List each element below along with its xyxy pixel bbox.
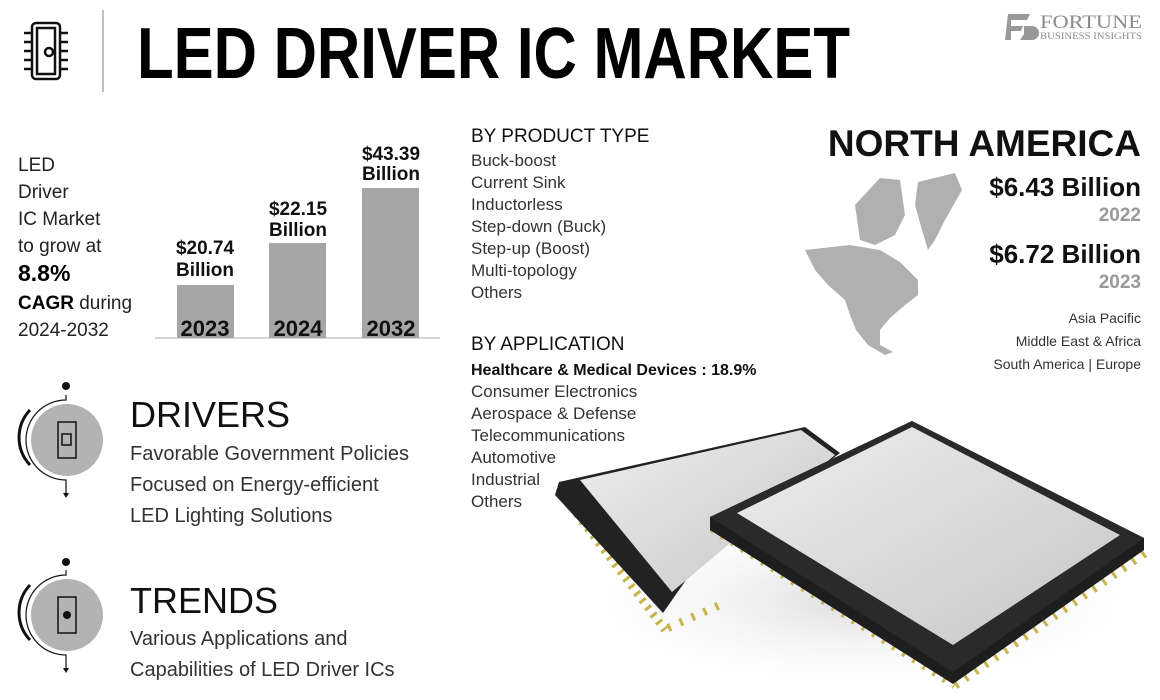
bar chart: Billion xyxy=(362,164,420,185)
back chip pins xyxy=(560,492,665,630)
text block: CAGR: CAGR during xyxy=(18,293,132,314)
bar chart xyxy=(155,144,440,341)
bar chart: $43.39 xyxy=(362,144,420,165)
panel: product type: Step-down (Buck) xyxy=(471,217,606,236)
region stats: Middle East & Africa xyxy=(1016,333,1141,349)
text block: CAGR: LED xyxy=(18,155,55,176)
text block: CAGR: to grow at xyxy=(18,236,102,257)
bar chart: Billion xyxy=(176,260,234,281)
region stats: 2022 xyxy=(1099,205,1141,226)
region stats: $6.72 Billion xyxy=(989,239,1141,269)
text block: CAGR: 8.8% xyxy=(18,260,70,286)
panel: application: Aerospace & Defense xyxy=(471,404,636,423)
heading: drivers: DRIVERS xyxy=(130,394,290,435)
bar chart: $22.15 xyxy=(269,199,327,220)
text: drivers: Focused on Energy-efficient xyxy=(130,474,379,496)
region stats: NORTH AMERICA xyxy=(828,123,1141,164)
icon: header chip xyxy=(24,23,68,79)
panel: application: Consumer Electronics xyxy=(471,382,637,401)
text: drivers: Favorable Government Policies xyxy=(130,443,409,465)
logo: BUSINESS INSIGHTS xyxy=(1040,31,1142,41)
text block: CAGR xyxy=(18,155,132,341)
panel: product type: Buck-boost xyxy=(471,151,556,170)
region stats: Asia Pacific xyxy=(1069,310,1141,326)
text: trends xyxy=(130,628,395,681)
panel: application: Automotive xyxy=(471,448,556,467)
panel: application: Healthcare & Medical Devices : 18.9% xyxy=(471,362,756,379)
panel: product type: Multi-topology xyxy=(471,261,577,280)
bar chart: 2024 xyxy=(274,316,323,341)
panel: product type: Others xyxy=(471,283,522,302)
region stats: $6.43 Billion xyxy=(989,172,1141,202)
bar chart: $20.74 xyxy=(176,238,234,259)
text: trends: Various Applications and xyxy=(130,628,348,650)
panel: product type: BY PRODUCT TYPE xyxy=(471,126,649,147)
panel: application: Industrial xyxy=(471,470,540,489)
logo xyxy=(1005,12,1142,41)
panel: application: BY APPLICATION xyxy=(471,334,624,355)
panel: product type xyxy=(471,126,649,302)
text block: CAGR: IC Market xyxy=(18,209,101,230)
text: trends: Capabilities of LED Driver ICs xyxy=(130,659,395,681)
map: north america xyxy=(805,173,962,355)
bar chart: 2023 xyxy=(181,316,229,341)
panel: product type: Current Sink xyxy=(471,173,566,192)
panel: product type: Step-up (Boost) xyxy=(471,239,590,258)
text: drivers: LED Lighting Solutions xyxy=(130,505,332,527)
text block: CAGR: 2024-2032 xyxy=(18,320,109,341)
text block: CAGR: Driver xyxy=(18,182,69,203)
panel: application: Others xyxy=(471,492,522,511)
front chip pins xyxy=(712,528,1146,685)
chips illustration xyxy=(540,421,1160,700)
region stats: South America | Europe xyxy=(993,356,1141,372)
region stats: 2023 xyxy=(1099,272,1141,293)
title: LED DRIVER IC MARKET xyxy=(137,14,850,94)
icon: drivers xyxy=(19,382,103,498)
region stats xyxy=(828,123,1141,372)
logo: FORTUNE xyxy=(1040,12,1142,33)
panel: application: Telecommunications xyxy=(471,426,625,445)
bar chart: 2032 xyxy=(367,316,415,341)
bar chart: Billion xyxy=(269,220,327,241)
text: drivers xyxy=(130,443,409,527)
icon: trends xyxy=(19,558,103,673)
panel: product type: Inductorless xyxy=(471,195,563,214)
panel: application xyxy=(471,334,756,511)
heading: trends: TRENDS xyxy=(130,580,278,621)
